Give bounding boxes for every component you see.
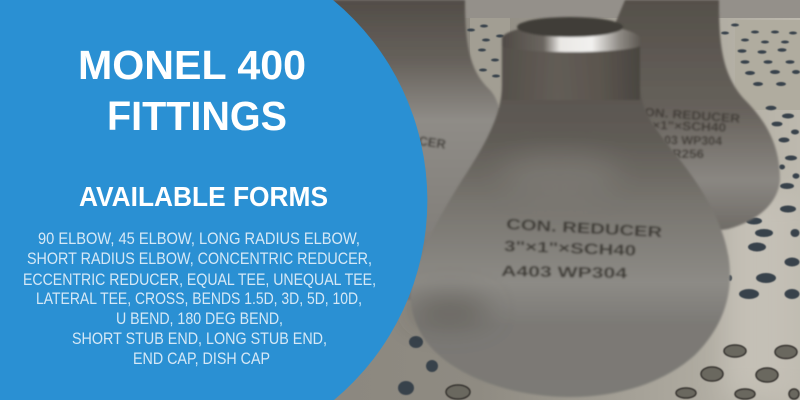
text: rear left marking: CER [418,133,447,152]
list of available forms: END CAP, DISH CAP [133,349,270,368]
title: FITTINGS [107,93,287,139]
left rear reducer [300,0,504,300]
right rear reducer [600,0,780,240]
text: rear right marking: R256 [672,147,704,161]
list of available forms: U BEND, 180 DEG BEND, [116,309,283,328]
reducer marking text: CON. REDUCER [506,216,663,241]
title [78,42,306,139]
reducer marking text: 3"×1"×SCH40 [504,238,636,260]
list of available forms: LATERAL TEE, CROSS, BENDS 1.5D, 3D, 5D, 10D, [36,289,362,308]
front concentric reducer [410,17,730,397]
list of available forms: 90 ELBOW, 45 ELBOW, LONG RADIUS ELBOW, [38,229,360,248]
reducer marking text: A403 WP304 [501,263,628,282]
reducer lip [502,24,640,52]
list of available forms: SHORT RADIUS ELBOW, CONCENTRIC REDUCER, [27,249,372,268]
text: rear right marking: 03 WP304 [664,133,723,148]
text: rear right marking: ON. REDUCER [644,105,741,126]
text: rear right marking [644,105,741,161]
list of available forms: SHORT STUB END, LONG STUB END, [72,329,327,348]
reducer marking text [501,216,663,282]
list of available forms: ECCENTRIC REDUCER, EQUAL TEE, UNEQUAL TEE, [23,270,376,289]
subheading: available forms: AVAILABLE FORMS [79,181,328,212]
blue circle panel [0,0,427,400]
text: rear right marking: ×1"×SCH40 [652,118,727,135]
list of available forms [23,229,376,368]
title: MONEL 400 [78,42,306,88]
